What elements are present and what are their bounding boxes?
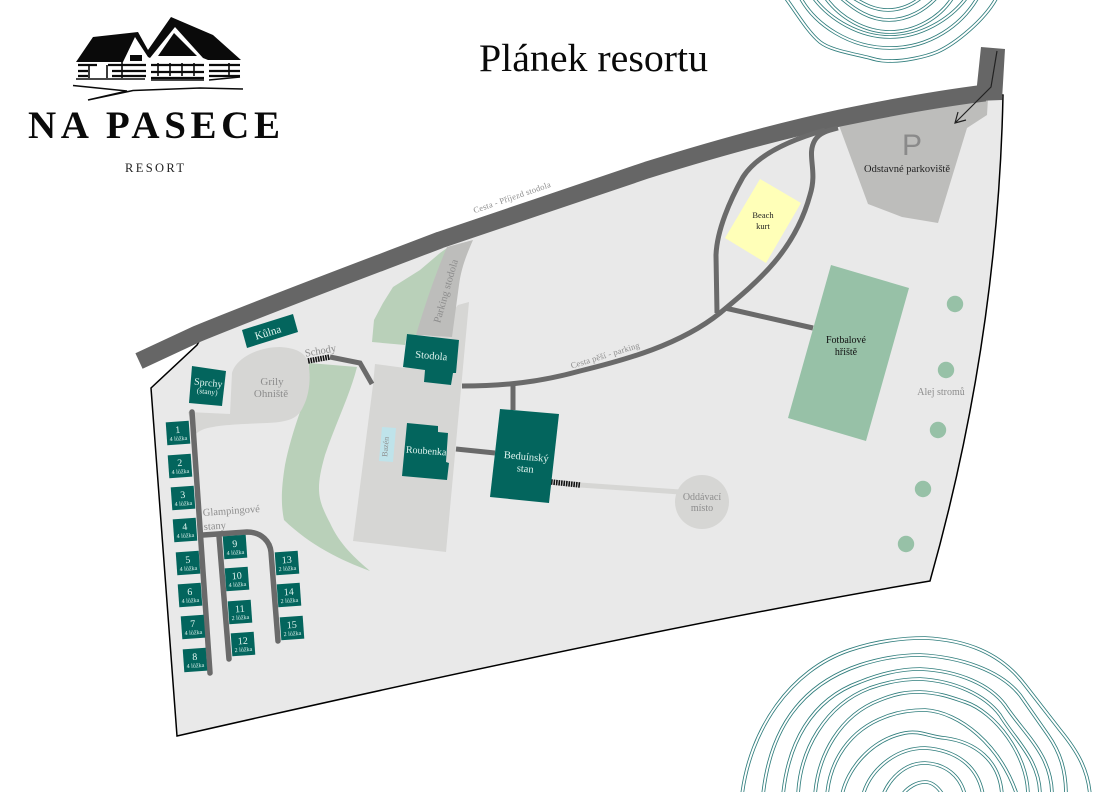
decorative rings: top right [785,0,997,61]
pool: Bazén [380,436,391,457]
tent 13 [275,551,299,575]
tree alley: Alej stromů [917,387,965,398]
tent 2 [168,454,192,478]
stairs [304,343,580,485]
tent 11: 11 [235,604,245,615]
tent 9: 4 lůžka [226,549,245,557]
tent 10: 4 lůžka [228,581,247,589]
tent 6: 6 [187,587,193,598]
building: Stodola [403,334,459,385]
tent 3: 3 [180,490,186,501]
tent 11 [228,600,252,624]
tent 7: 4 lůžka [184,629,203,637]
tent 3: 4 lůžka [174,500,193,508]
building: Kůlna: Kůlna [254,323,283,343]
ceremony spot [675,475,729,529]
tent 1: 1 [175,425,181,436]
building: Beduínský stan: Beduínský [503,450,550,465]
tent 2: 4 lůžka [171,468,190,476]
building: Sprchy: Sprchy [194,377,223,390]
glamping tents [166,421,304,672]
tent 7 [181,615,205,639]
building: Beduínský stan [490,409,559,503]
beach court: kurt [756,221,770,231]
road label: Cesta - Příjezd stodola [472,179,552,215]
green area: lower [282,363,370,571]
tent 1 [166,421,190,445]
green area: upper [372,248,447,345]
parking area [837,98,988,223]
tent 5 [176,551,200,575]
football pitch [788,265,909,441]
grill area: Grily [260,376,284,388]
tent 5: 4 lůžka [179,565,198,573]
tent 1: 4 lůžka [169,435,188,443]
logo [28,17,280,175]
tent 12: 12 [237,636,248,647]
building: Beduínský stan: stan [516,463,535,476]
ceremony spot: místo [691,503,713,514]
tent 14 [277,583,301,607]
tent 4: 4 [182,522,188,533]
ceremony spot: Oddávací [683,492,721,503]
tent 14: 2 lůžka [280,597,299,605]
beach court: Beach [752,210,774,220]
site ground [151,93,1003,736]
glamping label [202,504,261,533]
tent 13: 2 lůžka [278,565,297,573]
stairs: Schody [304,343,338,360]
glamping label: Glampingové [202,504,261,519]
parking area: P [902,129,922,162]
building: Stodola: Stodola [415,350,448,363]
tent 15: 15 [286,620,297,631]
tent 13: 13 [281,555,292,566]
parking stodola: Parking stodola [432,258,461,324]
building: Sprchy [189,366,226,406]
icon: house [73,17,243,100]
title: Plánek resortu [479,37,708,80]
decorative rings: bottom right [742,638,1090,792]
tent 8: 4 lůžka [186,662,205,670]
footpaths [192,128,838,673]
logo subtitle: RESORT [125,161,184,175]
tent 15 [280,616,304,640]
glamping label: stany [203,520,227,533]
arrow to parking [955,51,997,123]
path label: Cesta pěší - parking [569,340,641,370]
tent 5: 5 [185,555,191,566]
tent 12: 2 lůžka [234,646,253,654]
panel: map [139,47,1005,736]
tent 10: 10 [231,571,242,582]
tent 7: 7 [190,619,196,630]
building: Kůlna [242,314,298,348]
grill area: Ohniště [254,388,288,400]
building: Roubenka: Roubenka [406,445,447,458]
tent 9 [223,535,247,559]
football pitch: hřiště [835,347,858,358]
tent 15: 2 lůžka [283,630,302,638]
tent 6: 4 lůžka [181,597,200,605]
tent 3 [171,486,195,510]
tent 2: 2 [177,458,183,469]
beach court [725,179,801,263]
tent 10 [225,567,249,591]
grill area [188,347,310,435]
tent 9: 9 [232,539,238,550]
tree alley [898,296,965,552]
parking area: Odstavné parkoviště [864,164,950,175]
tent 8: 8 [192,652,198,663]
tent 12 [231,632,255,656]
pool [379,427,396,462]
parking stodola [416,240,473,337]
tent 6 [178,583,202,607]
courtyard [353,302,469,552]
tent 4 [173,518,197,542]
tent 4: 4 lůžka [176,532,195,540]
tent 14: 14 [283,587,294,598]
main road [139,47,1005,361]
building: Roubenka [402,423,449,480]
building: Sprchy: (stany) [196,386,219,397]
tent 11: 2 lůžka [231,614,250,622]
football pitch: Fotbalové [826,335,867,346]
logo wordmark: NA PASECE [28,104,280,147]
tent 8 [183,648,207,672]
